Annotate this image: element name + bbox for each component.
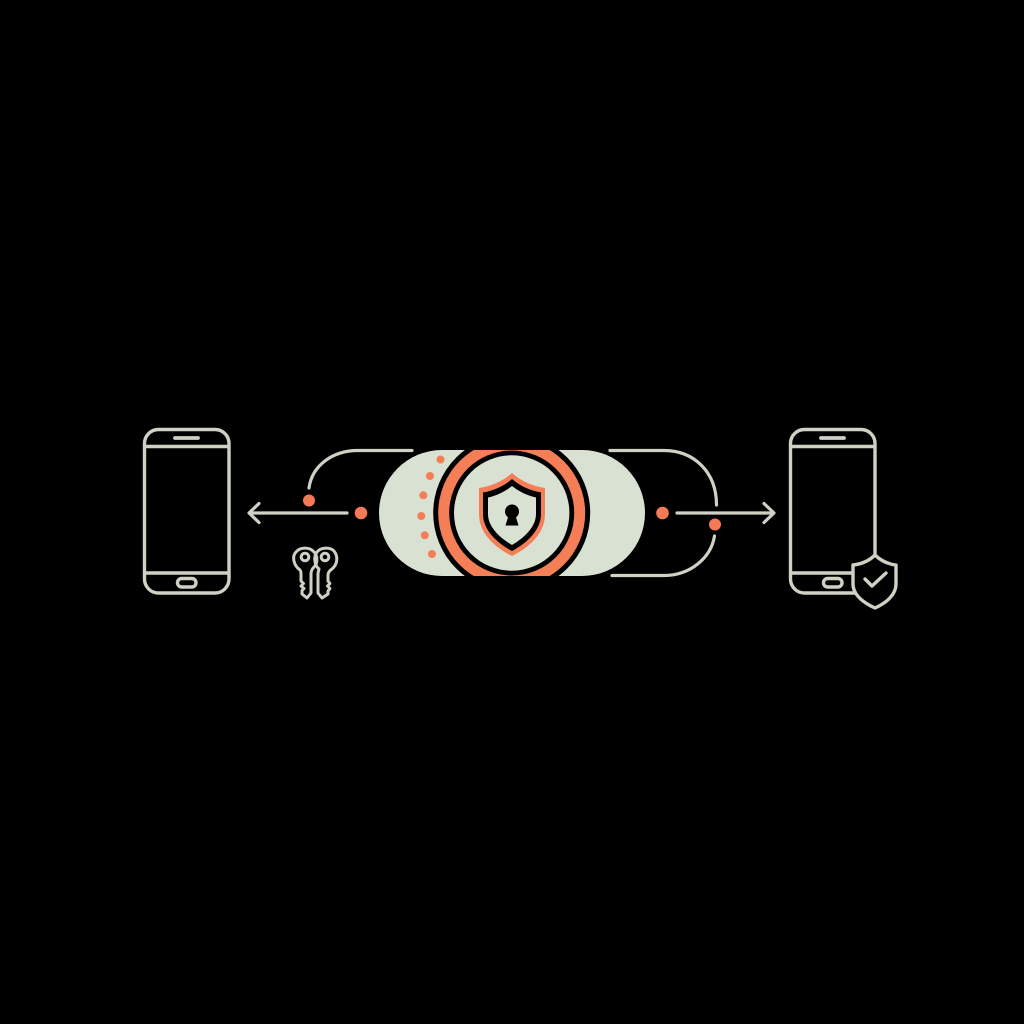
left key [294, 548, 317, 598]
connector: upper left curve [309, 450, 412, 488]
concentric rings [433, 450, 590, 576]
icon: left phone [144, 430, 229, 593]
central capsule with lock [379, 450, 645, 576]
icon: verified shield with check [853, 555, 896, 608]
orange dots arc [417, 456, 444, 558]
icon: pair of keys [294, 548, 337, 598]
node dots [303, 494, 721, 530]
illustration: encrypted transfer between phones [142, 428, 898, 610]
arrow: to left phone [249, 504, 347, 522]
arrow: to right phone [677, 504, 774, 522]
right key [315, 548, 337, 598]
connector: lower right curve [612, 536, 714, 576]
connector: upper right curve [610, 450, 716, 505]
icon: right phone [790, 430, 875, 593]
capsule body [379, 450, 645, 576]
shield with keyhole [479, 473, 545, 556]
